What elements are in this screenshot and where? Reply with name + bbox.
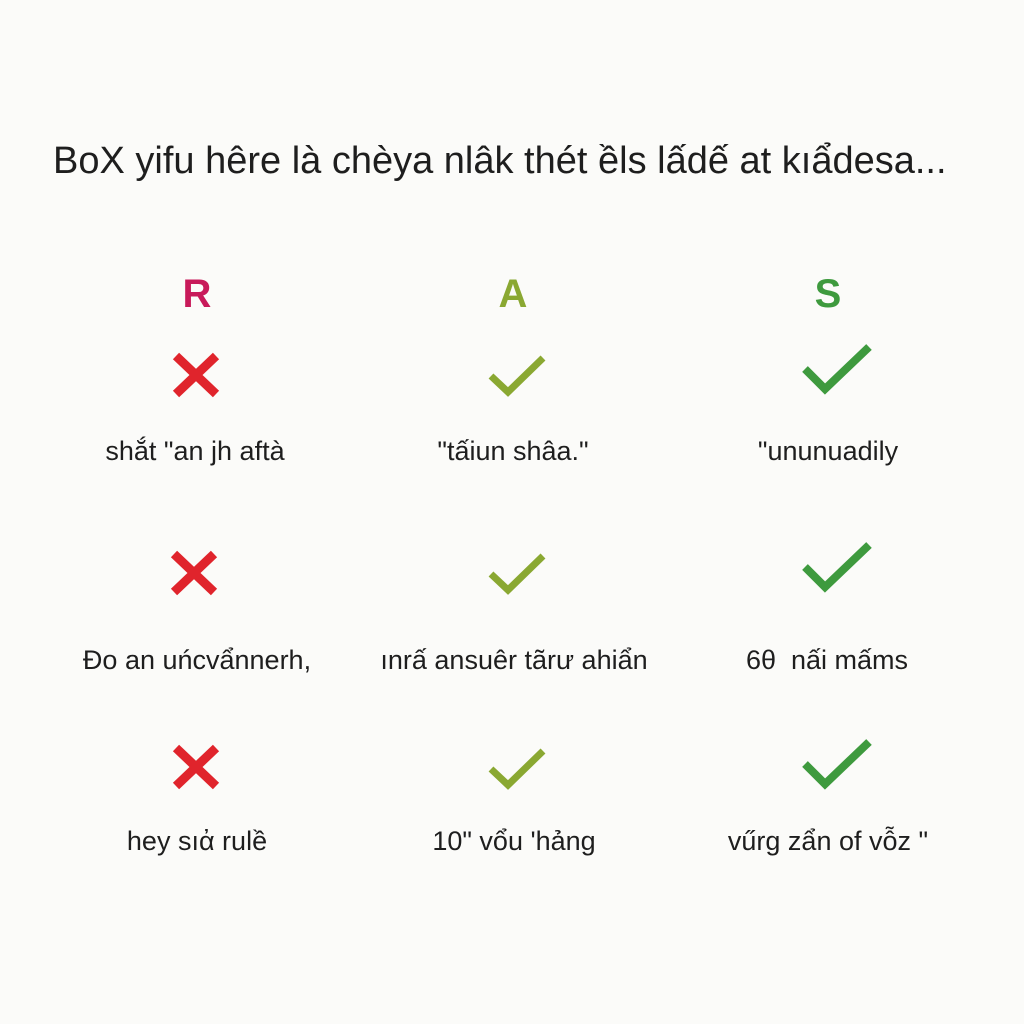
icon: cross row 2 [171, 550, 217, 596]
column header: R: R [183, 272, 211, 316]
text S2: 6θ nấi mấms [746, 645, 908, 675]
icon: check A row 1 [488, 356, 546, 397]
icon: check A row 3 [488, 748, 546, 790]
icon: check A row 2 [488, 554, 546, 595]
column header: A: A [499, 272, 527, 316]
text A2: ınrấ ansuêr tãrư ahiẩn [380, 645, 648, 675]
icon: cross row 3 [173, 744, 219, 790]
column header: S: S [815, 272, 841, 316]
icon: check S row 1 [802, 344, 872, 395]
icon: cross row 1 [173, 352, 219, 398]
text A3: 10" vổu 'hảng [432, 826, 596, 856]
text A1: "tấiun shâa." [437, 436, 589, 466]
title: BoX yifu hêre là chèya nlâk thét ềls lấdế at kıẩdesa... [53, 140, 947, 182]
icon: check S row 3 [802, 739, 872, 790]
text S3: vűrg zẩn of vỗz " [728, 826, 928, 856]
text S1: "ununuadily [758, 436, 898, 466]
icon: check S row 2 [802, 542, 872, 593]
text R2: Ðo an uńcvẩnnerh, [83, 645, 311, 675]
text R1: shắt "an jh aftà [105, 436, 285, 466]
text R3: hey sıἀ rulề [127, 826, 267, 856]
